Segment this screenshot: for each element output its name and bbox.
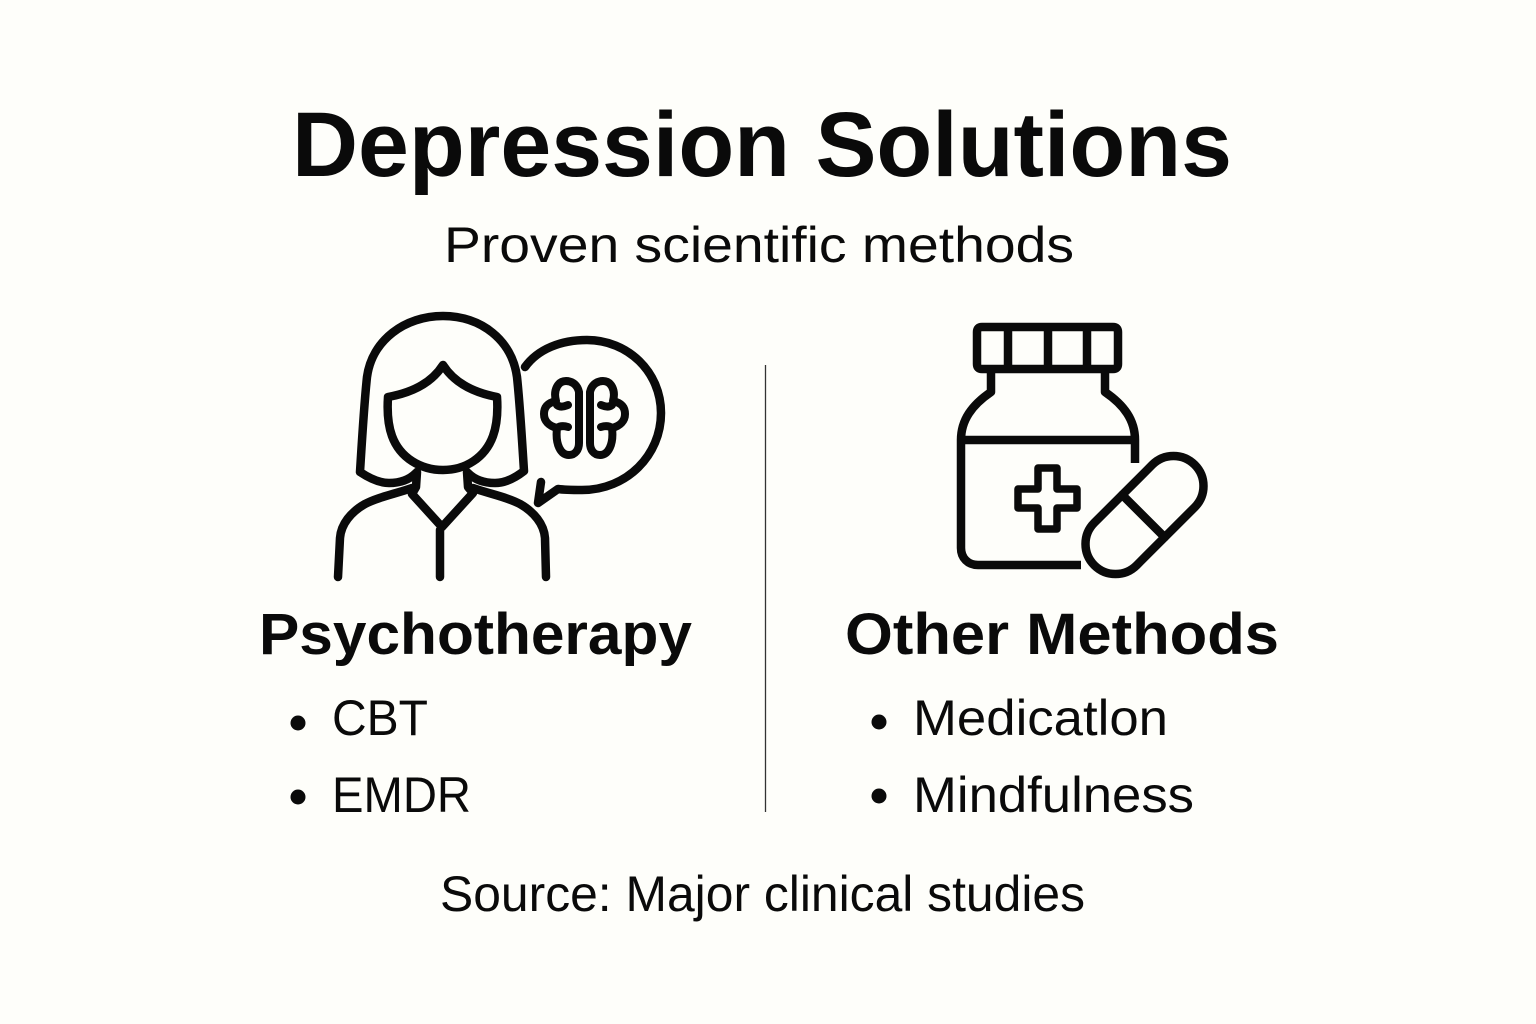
subtitle: Proven scientific methods [444, 217, 1074, 273]
capsule [1073, 444, 1216, 586]
bottle cap [977, 327, 1118, 369]
list: psychotherapy methods: EMDR [332, 767, 471, 823]
icon: therapist with brain speech bubble [338, 316, 661, 577]
list: other methods: Mindfulness [913, 767, 1194, 823]
divider [764, 365, 766, 812]
heading: psychotherapy: Psychotherapy [259, 602, 692, 667]
list: other methods [872, 690, 1194, 823]
bottle body [961, 370, 1135, 565]
list: other methods: Medicatlon [913, 690, 1168, 746]
shoulders and torso [338, 488, 546, 577]
speech bubble [525, 340, 661, 503]
icon: medicine bottle and capsule [961, 327, 1216, 586]
source note: Source: Major clinical studies [440, 866, 1085, 922]
brain [544, 381, 625, 455]
hair [360, 316, 524, 483]
neck and collar [412, 472, 473, 527]
title: Depression Solutions [292, 94, 1232, 196]
medical cross [1018, 468, 1077, 529]
heading: other methods: Other Methods [845, 602, 1279, 667]
list: psychotherapy methods [290, 690, 471, 823]
face [388, 365, 497, 470]
list: psychotherapy methods: CBT [332, 690, 428, 746]
